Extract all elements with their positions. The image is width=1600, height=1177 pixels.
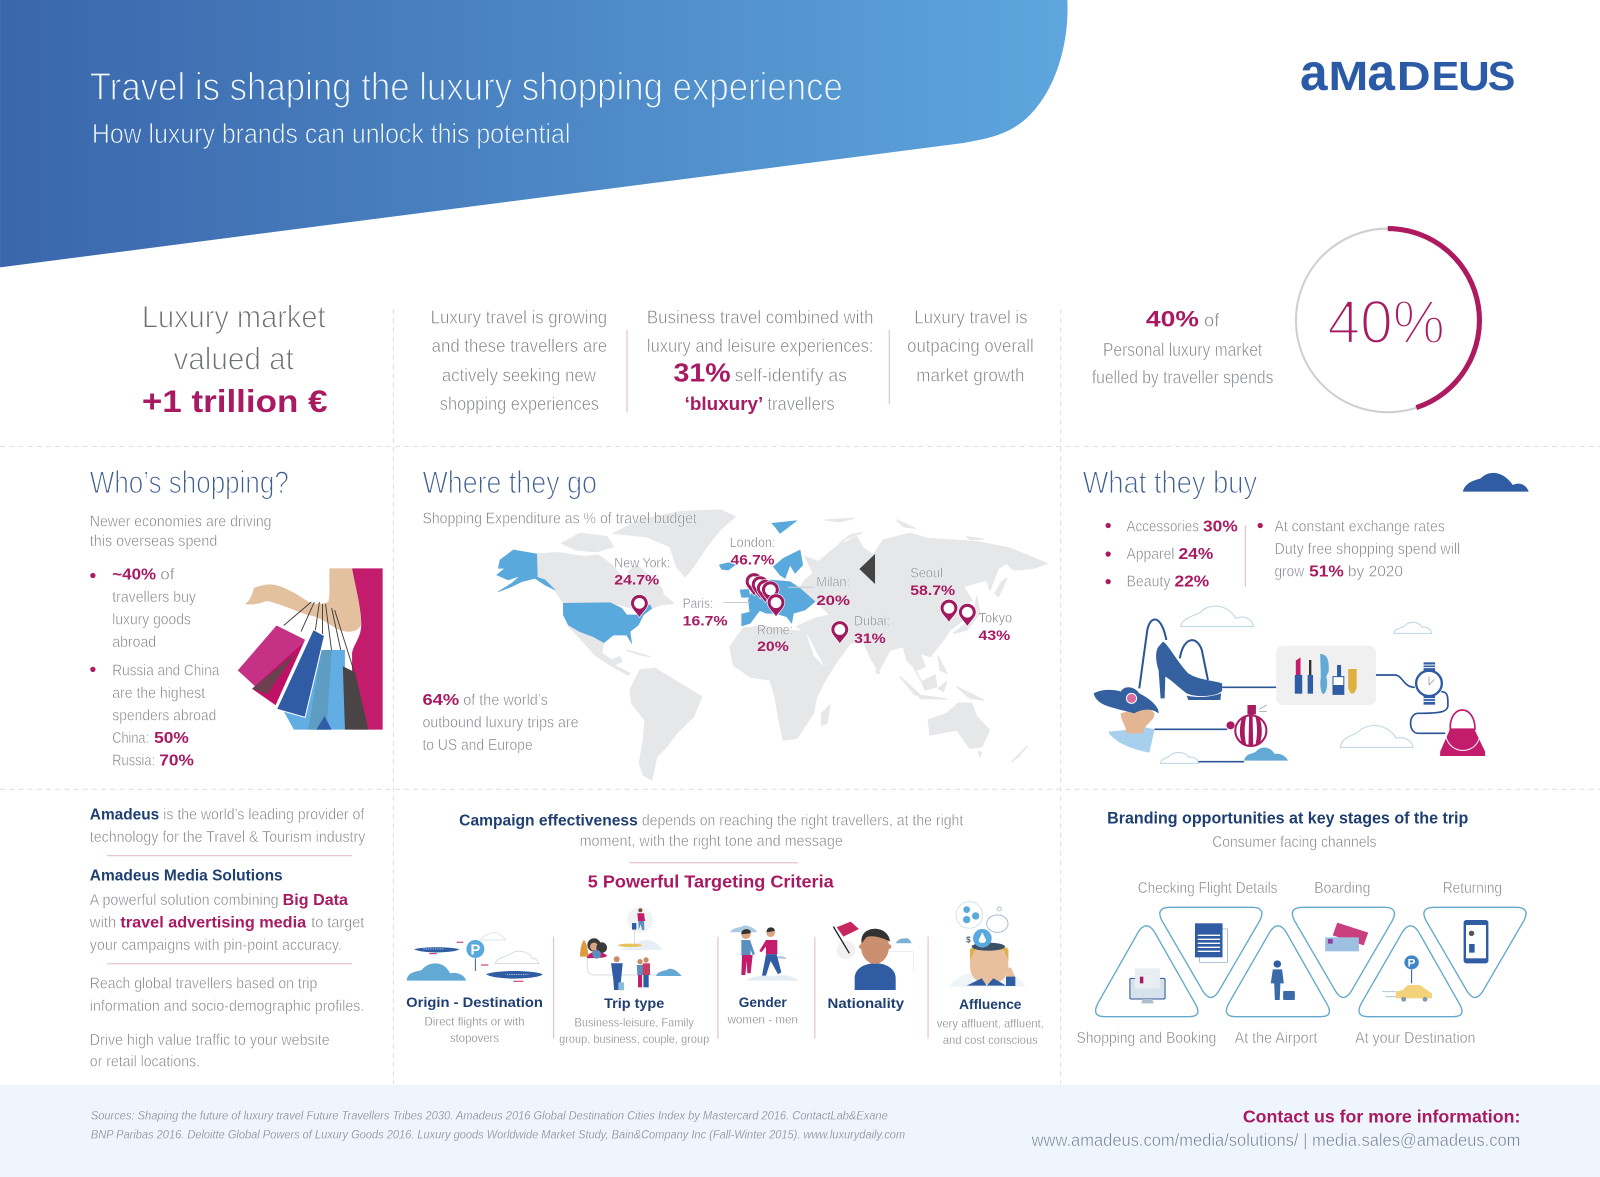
contact: www.amadeus.com/media/solutions/ | media.sales@amadeus.com [1031,1130,1520,1150]
text block: duty free: grow [1274,564,1305,581]
text block: campaign effectiveness: Campaign effectiveness [459,812,638,829]
bullets: China: [112,730,149,747]
heading: Who’s shopping? [90,464,289,500]
panel: market value: +1 trillion € [142,383,328,419]
text block: bluxury travellers: ‘bluxury’ [685,393,763,414]
text block: outpacing growth: outpacing overall [907,335,1034,356]
triangle: boarding [1292,907,1395,997]
icon: document [1195,923,1227,962]
city labels: 24.7% [614,573,660,589]
city labels: 20% [757,639,789,655]
heading: What they buy [1083,464,1257,500]
outline clouds [1161,606,1432,763]
triangle: checking flight details [1160,907,1262,997]
labels: criteria: very affluent, affluent, [937,1017,1044,1031]
text block: reach [90,976,364,1070]
subheading: Branding opportunities at key stages of the trip [1107,809,1468,827]
icon: nationality [833,922,913,990]
text block: 64% outbound: 64% [422,692,460,709]
text block: outpacing growth: market growth [916,365,1024,386]
labels: criteria: Direct flights or with [425,1014,525,1028]
stage labels [1077,880,1502,1047]
text block: outpacing growth [907,306,1034,386]
text block: luxury travel growing [431,306,607,414]
panel: amadeus media solutions: technology for the Travel & Tourism industry [90,829,366,846]
text block: intro [90,514,271,550]
labels: criteria: Nationality [828,996,904,1012]
text block: campaign effectiveness: depends on reaching the right travellers, at the right [642,812,964,829]
icon: taxi parking: P [1408,958,1416,970]
city labels: 20% [816,593,850,609]
icon: origin destination [407,932,543,981]
bullets: 50% [154,730,189,747]
title: Travel is shaping the luxury shopping experience [90,66,843,109]
bullets: of [160,567,175,584]
icon: woman with hat [1094,687,1159,753]
sources: Sources: Shaping the future of luxury travel Future Travellers Tribes 2030. Amadeus 2016 Global Destination Cities Index by Mastercard 2016. ContactLab&Exane [91,1109,888,1122]
icons: gender, nationality, affluence [730,902,1026,990]
logo: amadeus: M [1329,53,1368,99]
city labels: 58.7% [910,583,955,599]
logo: amadeus [1300,44,1515,102]
stage labels: At the Airport [1235,1030,1318,1047]
bullets: are the highest [112,685,206,702]
icon: origin destination: P [470,942,480,958]
panel: amadeus media solutions [89,806,366,1070]
logo: amadeus: S [1488,53,1515,99]
icon: monitor [1130,968,1165,1003]
city labels: 16.7% [683,613,728,629]
text block: 64% outbound: outbound luxury trips are [422,715,579,732]
triangle: returning [1424,907,1526,997]
panel: where they go [422,464,1047,780]
panel: amadeus media solutions: is the world’s leading provider of [163,806,365,823]
contact [1031,1106,1520,1150]
labels: criteria: Origin - Destination [406,995,543,1011]
text block: bluxury travellers [647,306,873,414]
text block: bluxury travellers: Business travel combined with [647,306,873,327]
chart: 40% ring: 40% [1328,288,1445,356]
bullets: Russia and China [112,662,220,679]
text block: powerful solution: Big Data [283,892,348,909]
list: categories: 24% [1179,546,1214,563]
caption: Consumer facing channels [1212,834,1377,851]
city labels: Dubai: [854,613,890,629]
text block: bluxury travellers: luxury and leisure experiences: [647,335,873,356]
bullets: Russia: [112,752,155,769]
labels: criteria: and cost conscious [943,1033,1038,1047]
triangle: at your destination [1359,926,1462,1017]
text block: duty free [1258,519,1460,581]
subheading: 5 Powerful Targeting Criteria [588,872,834,892]
stage labels: Returning [1443,880,1502,897]
panel: market value: Luxury market [142,299,326,335]
bullets: luxury goods [112,611,191,628]
map: world [497,510,1047,780]
city labels: 31% [854,631,886,647]
icon: watch [1376,662,1448,733]
text block: luxury travel growing: shopping experiences [440,393,599,414]
text block: intro: Newer economies are driving [90,514,271,531]
city labels: 46.7% [731,552,775,568]
text block: luxury travel growing: Luxury travel is growing [431,306,607,327]
icon: handbag [1440,710,1485,756]
text block: 40% of personal luxury market: fuelled by traveller spends [1092,367,1273,388]
panel: branding opportunities [1077,809,1526,1047]
bullets: ~40% [112,567,157,584]
city labels: 43% [979,628,1011,644]
city labels: London: [730,535,776,551]
text block: bluxury travellers: travellers [767,393,835,414]
labels: criteria: Trip type [604,996,664,1012]
text block: 40% of personal luxury market [1092,307,1273,388]
bullets: travellers buy [112,589,196,606]
text block: 40% of personal luxury market: of [1204,310,1220,331]
panel: market value [142,299,328,419]
text block: reach: Drive high value traffic to your website [90,1032,330,1049]
city labels: New York: [614,555,670,571]
text block: 40% of personal luxury market: 40% [1146,307,1199,332]
bullets: abroad [112,634,156,651]
text block: 64% outbound: of the world’s [463,692,548,709]
text block: bluxury travellers: self-identify as [735,365,847,386]
stage labels: Shopping and Booking [1077,1030,1216,1047]
stage labels: Checking Flight Details [1138,880,1278,897]
text block: powerful solution: with [89,915,116,932]
text block: powerful solution [89,892,365,954]
icon: taxi parking [1382,955,1432,1002]
list: categories: Beauty [1127,574,1171,591]
icon: affluence [948,902,1026,987]
chart: 40% ring [1296,229,1480,412]
logo: amadeus: a [1367,44,1396,102]
triangles and stage icons [1096,907,1526,1017]
logo: amadeus: U [1458,53,1490,99]
text block: duty free: At constant exchange rates [1274,519,1445,536]
text block: intro: this overseas spend [90,533,217,550]
icon: cosmetics box [1276,646,1376,705]
labels: criteria [406,995,1044,1047]
sources: BNP Paribas 2016. Deloitte Global Powers of Luxury Goods 2016. Luxury goods Worldwide Market Study, Bain&Company Inc (Fall-Winter 2015). www.luxurydaily.com [91,1129,905,1142]
labels: criteria: Affluence [959,997,1021,1013]
panel: what they buy [1083,464,1529,763]
panel: amadeus media solutions: Amadeus [90,806,159,823]
icon: affluence: $ [966,935,971,944]
bullets [90,567,220,769]
city labels: Seoul [910,566,943,582]
icon: trip type [580,907,682,990]
text block: powerful solution: to target [311,915,365,932]
footer [0,1085,1600,1177]
contact: Contact us for more information: [1243,1106,1520,1126]
stage labels: At your Destination [1355,1030,1475,1047]
map caption: Shopping Expenditure as % of travel budget [422,510,698,527]
labels: criteria: group, business, couple, group [559,1032,709,1046]
icon: gender [730,926,798,981]
icon: traveller [1271,960,1295,1000]
icon: shoe [1139,619,1222,700]
panel: who's shopping [90,464,383,769]
text block: campaign effectiveness [459,812,964,850]
text block: campaign effectiveness: moment, with the right tone and message [580,833,843,850]
labels: criteria: Gender [739,995,787,1011]
list: categories: Accessories [1127,519,1199,536]
text block: duty free: 51% [1309,564,1344,581]
text block: powerful solution: travel advertising media [120,915,307,932]
list: categories [1105,519,1238,591]
panel: market value: valued at [173,340,294,376]
text block: powerful solution: your campaigns with pin-point accuracy. [90,937,342,954]
labels: criteria: women - men [727,1012,798,1026]
text block: duty free: Duty free shopping spend will [1274,541,1460,558]
triangle: at the airport [1226,926,1329,1017]
text block: reach: or retail locations. [90,1053,200,1070]
panel: targeting criteria [406,812,1044,1047]
text block: powerful solution: A powerful solution combining [90,892,279,909]
bullets: spenders abroad [112,707,216,724]
heading: Where they go [422,464,597,500]
sources [91,1109,905,1142]
city labels [614,535,1012,655]
map pins [631,573,976,644]
city labels: Rome: [757,623,793,639]
list: categories: 30% [1203,519,1238,536]
city labels: Paris: [683,596,713,612]
logo: amadeus: a [1300,44,1329,102]
text block: 64% outbound: to US and Europe [422,737,533,754]
text block: 64% outbound [422,692,579,754]
text block: reach: Reach global travellers based on trip [90,976,317,993]
list: categories: Apparel [1127,546,1174,563]
logo: amadeus: E [1432,53,1459,99]
stage labels: Boarding [1314,880,1370,897]
icons: origin and trip type [407,907,682,990]
bullets: 70% [159,752,194,769]
text block: outpacing growth: Luxury travel is [914,306,1028,327]
logo: amadeus: D [1397,53,1431,99]
header banner [0,0,1068,267]
labels: criteria: stopovers [450,1031,499,1045]
illustration: shopping bags [238,568,383,730]
text block: luxury travel growing: and these travellers are [432,335,607,356]
marker [859,554,875,584]
text block: luxury travel growing: actively seeking new [442,365,597,386]
illustration: luxury goods journey [1094,473,1529,763]
city labels: Tokyo [979,610,1012,626]
subheading: Amadeus Media Solutions [90,868,283,885]
text block: bluxury travellers: 31% [673,360,731,388]
icon: phone [1464,920,1488,963]
icon: tickets [1325,923,1368,951]
text block: duty free: by 2020 [1348,564,1403,581]
subtitle: How luxury brands can unlock this potential [92,118,570,149]
text block: reach: information and socio-demographic profiles. [90,998,364,1015]
labels: criteria: Business-leisure, Family [574,1015,695,1029]
list: categories: 22% [1174,574,1210,591]
icon: perfume [1227,705,1288,761]
city labels: Milan: [816,575,850,591]
icon: blue cloud [1463,473,1529,492]
text block: 40% of personal luxury market: Personal luxury market [1103,339,1262,360]
triangle: shopping and booking [1096,926,1198,1017]
